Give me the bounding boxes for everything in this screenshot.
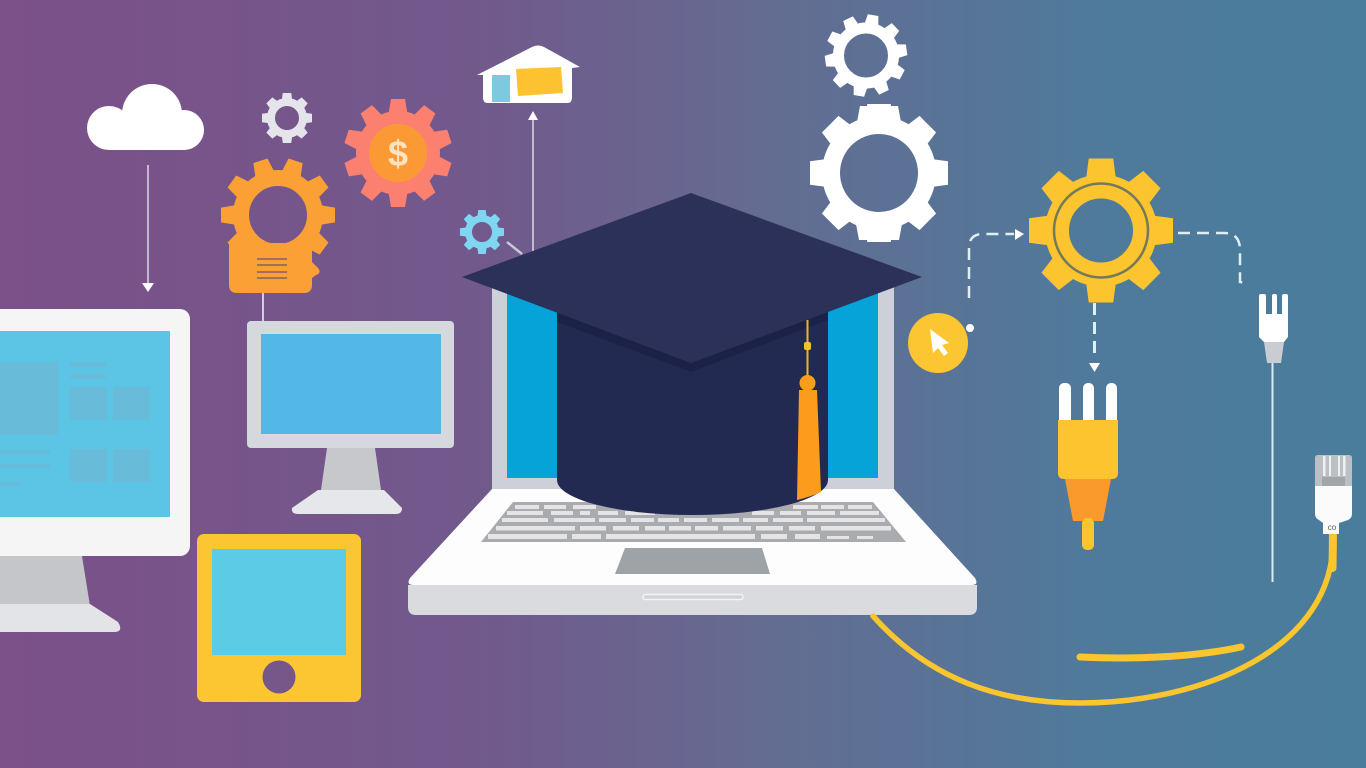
yellow cable: [873, 532, 1333, 703]
cap shadow: [557, 312, 828, 372]
tablet: [197, 534, 361, 702]
arrow: laptop to house: [528, 111, 538, 252]
laptop: [408, 275, 977, 615]
dashed arrow: to yellow gear: [969, 229, 1024, 298]
dashed arrow: yellow gear to plug: [1089, 303, 1100, 372]
icon: upper white gear: [818, 8, 914, 103]
icon: yellow plug: [1058, 383, 1118, 550]
cap board: [462, 193, 922, 363]
icon: large white gear: [810, 104, 948, 242]
icon: orange gear with document: [206, 143, 350, 293]
arrow: cloud to monitor: [142, 165, 154, 292]
laptop base: [409, 489, 976, 585]
connector: blue gear to laptop: [507, 242, 522, 254]
laptop screen: [492, 275, 894, 495]
graduation cap: [462, 193, 922, 515]
connector: orange gear to monitor: [262, 293, 264, 322]
icon: cloud: [87, 84, 204, 150]
icon: yellow cursor badge: [908, 313, 974, 373]
icon: yellow gear: [1029, 158, 1173, 302]
dashed line: yellow gear to right plug: [1178, 233, 1246, 283]
screen content blocks: [0, 362, 150, 486]
touchpad: [615, 548, 770, 574]
icon: coral dollar gear: [344, 99, 452, 207]
icon: small blue gear: [460, 210, 504, 254]
cap body: [557, 300, 828, 515]
icon: coral dollar gear: $: [388, 133, 408, 174]
icon: house: [477, 46, 580, 103]
tassel: [797, 320, 821, 500]
icon: small grey gear: [262, 93, 312, 143]
medium monitor: [247, 321, 454, 514]
icon: small white plug with wire: [1259, 294, 1288, 582]
keyboard: [481, 502, 906, 542]
large monitor: [0, 309, 190, 632]
icon: cable connector: co: [1328, 523, 1337, 532]
front notch: [643, 594, 743, 600]
icon: cable connector: [1315, 455, 1352, 534]
